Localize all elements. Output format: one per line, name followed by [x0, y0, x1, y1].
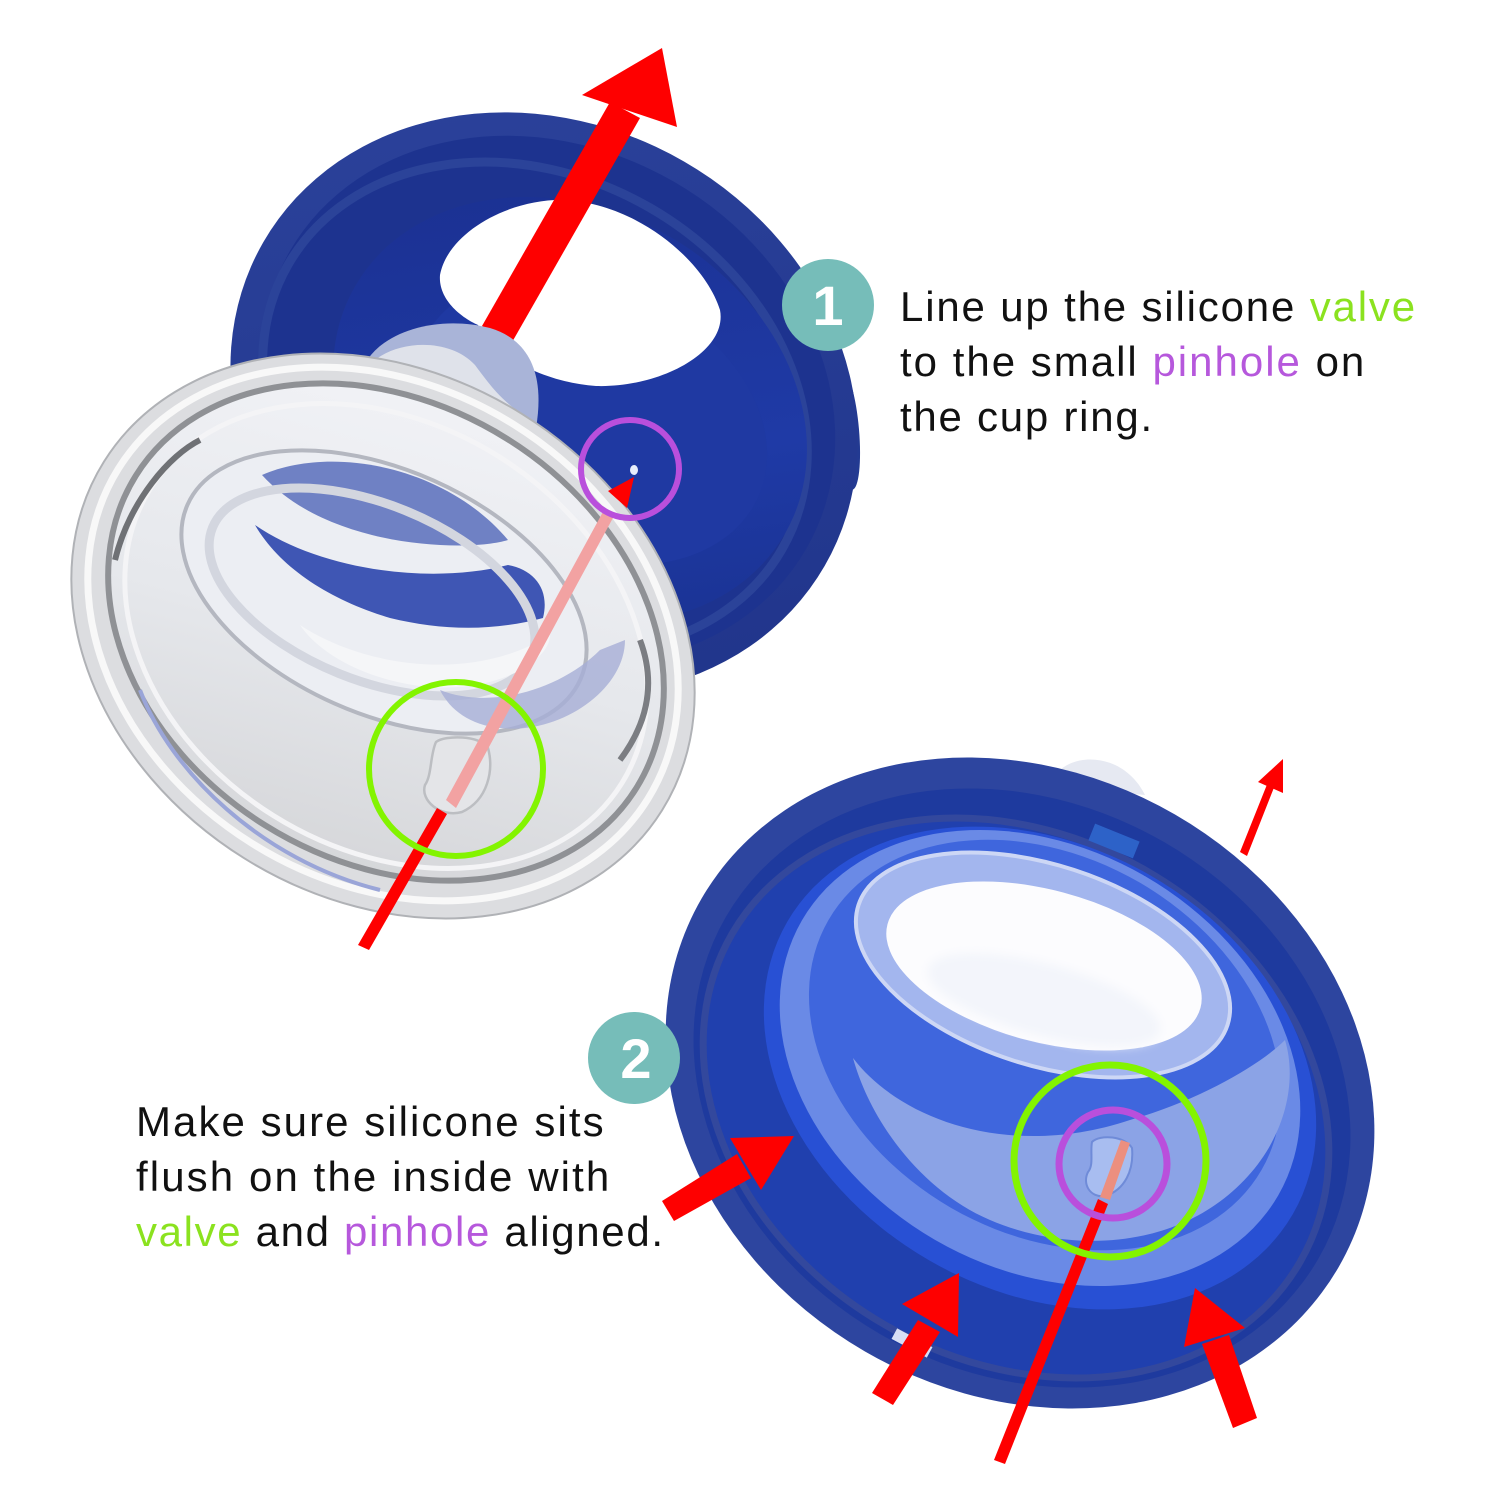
- number badge 2: 2: [620, 1027, 652, 1090]
- step 1 text: the cup ring.: [900, 393, 1154, 440]
- small red arrowhead at pinhole: [608, 477, 634, 508]
- dome of flange: [138, 393, 630, 791]
- cup opening hole: [440, 200, 721, 386]
- pinhole: [630, 465, 638, 475]
- step 2 text: Make sure silicone sits: [136, 1098, 606, 1145]
- number badge 2: [588, 1012, 680, 1104]
- red arrow bottom right: [1184, 1288, 1257, 1428]
- valve: [1086, 1137, 1132, 1196]
- bottom small red arrow: [1240, 759, 1283, 856]
- rim highlight: [1088, 824, 1140, 858]
- clear ring of dome: [828, 810, 1258, 1120]
- valve: [424, 737, 490, 813]
- number badge 1: 1: [812, 274, 844, 337]
- top red arrow: [482, 48, 677, 344]
- step 2 text: flush on the inside with: [136, 1153, 611, 1200]
- green circle: [1014, 1065, 1206, 1257]
- flange dark accents: [115, 440, 200, 560]
- valve circle: [369, 682, 543, 856]
- pink part of long line: [1100, 1140, 1130, 1200]
- step 1 text: to the small pinhole on: [900, 338, 1366, 385]
- red arrow left: [662, 1136, 794, 1221]
- long red line at bottom: [994, 1199, 1108, 1464]
- number badge 1: [782, 259, 874, 351]
- pinhole circle: [581, 420, 679, 518]
- red arrow bottom middle: [872, 1273, 959, 1405]
- step 1 text: Line up the silicone valve: [900, 283, 1417, 330]
- top product: clear silicone flange: [0, 239, 801, 1033]
- pink line seen through flange: [446, 510, 614, 808]
- neck: [366, 323, 539, 428]
- white dome: [868, 851, 1220, 1081]
- purple circle: [1059, 1110, 1167, 1218]
- pale crescent round the valve: [853, 1040, 1290, 1241]
- top product: blue cup ring: [123, 0, 965, 808]
- step 2 text: valve and pinhole aligned.: [136, 1208, 665, 1255]
- bottom product: [546, 631, 1494, 1500]
- red line below flange: [358, 808, 447, 950]
